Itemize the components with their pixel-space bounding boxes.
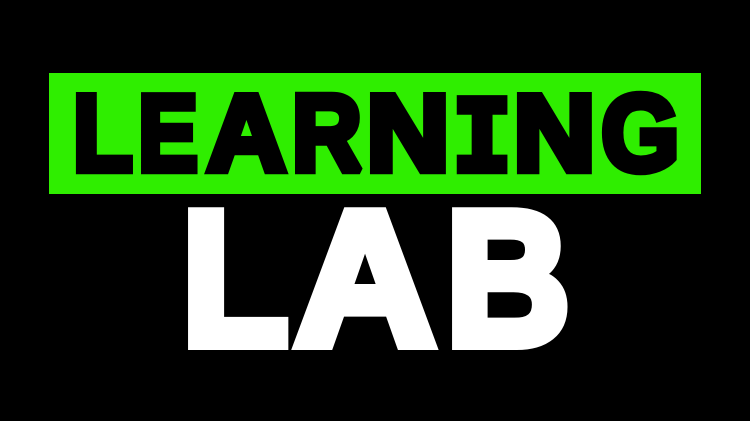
- heading: LEARNING: L: [73, 73, 133, 193]
- heading: LEARNING: E: [138, 73, 198, 194]
- heading: LEARNING: A: [207, 73, 286, 194]
- heading: LAB: A: [295, 172, 435, 385]
- heading: LAB: B: [446, 173, 570, 385]
- heading: LAB: [182, 172, 570, 385]
- heading: LEARNING: N: [513, 72, 596, 194]
- heading: LEARNING: [73, 72, 679, 204]
- heading: LEARNING: N: [366, 73, 450, 193]
- heading: LAB: L: [182, 172, 288, 385]
- heading: LEARNING: I: [453, 81, 511, 204]
- green banner: [49, 73, 701, 194]
- heading: LEARNING: R: [292, 72, 362, 193]
- heading: LEARNING: G: [601, 73, 679, 194]
